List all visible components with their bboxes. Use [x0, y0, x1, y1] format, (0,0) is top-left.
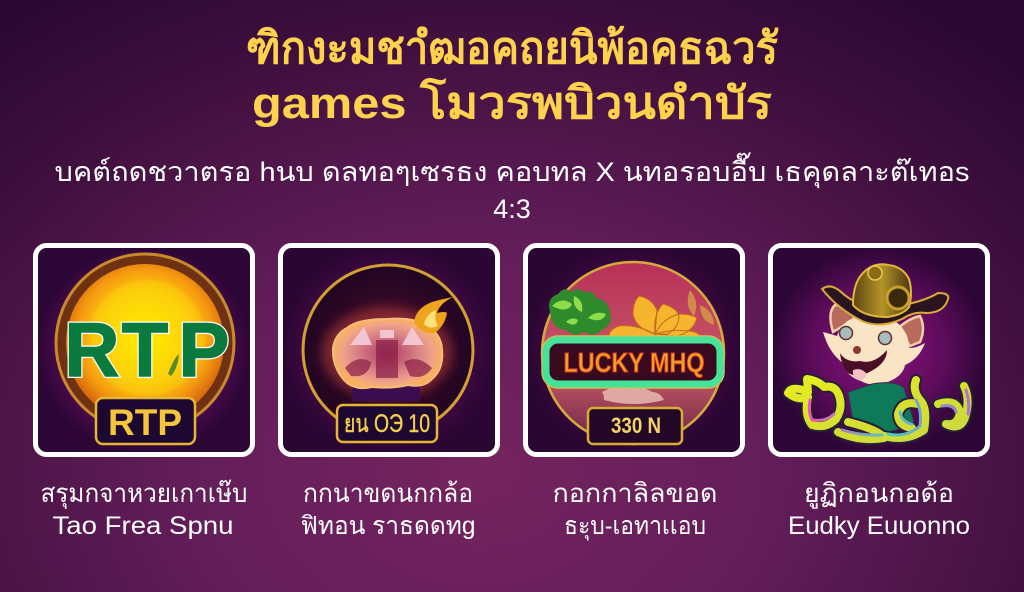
icon: floral medallion — [542, 262, 724, 444]
icon: golden RTP coin: P — [179, 308, 229, 393]
subtitle: บคต์ถดชวาตรอ hนบ ดลทอๆเซรธง คอบทล X นทอรอบอื๊บ เธคุดลาะต๊เทอs — [54, 152, 970, 189]
badge: mask score: ยน OЭ 10 — [344, 410, 430, 438]
label: card 4: Eudky Euuonno — [788, 512, 970, 540]
icon: golden RTP coin: T — [122, 308, 168, 393]
title — [246, 24, 779, 128]
label: card 1: Tao Frea Spnu — [52, 512, 234, 540]
badge: Lucky score — [588, 408, 682, 444]
card frame — [36, 246, 252, 454]
icon: golden RTP coin — [56, 254, 234, 432]
label: card 3: ธะุบ-เอทาเเอบ — [564, 512, 706, 541]
label: card 4 — [788, 478, 970, 540]
card frame — [770, 246, 988, 454]
label: card 3: กอกกาลิลขอด — [552, 478, 718, 508]
panel: Lucky game card — [526, 246, 742, 454]
icon: colourful lettering — [788, 379, 969, 439]
badge: mask score — [337, 405, 437, 442]
title: ฑิกงะมชาํฒอคถยนิพ้อคธฉวรั — [246, 24, 779, 73]
label: card 2 — [300, 478, 476, 540]
panel: RTP game card — [36, 246, 252, 454]
icon: golden RTP coin: R — [65, 308, 119, 393]
banner: Lucky — [542, 336, 724, 388]
icon: fox in cowboy hat — [822, 264, 948, 385]
icon: golden RTP coin: T — [122, 308, 168, 393]
badge: RTP — [96, 398, 195, 444]
title: games โมวรพบิวนดำบัร — [252, 76, 772, 128]
label: card 1: สรุมกจาหวยเกาเษ๊บ — [40, 478, 248, 509]
icon: glowing mask medallion — [303, 265, 473, 435]
label: card 3 — [552, 478, 718, 541]
subtitle: 4:3 — [493, 194, 531, 224]
label: card 2: กกนาขดนกกล้อ — [303, 478, 473, 508]
panel: mask game card — [280, 246, 498, 454]
label: card 1 — [40, 478, 248, 540]
label: card 4: ยูฏิกอนกอด้อ — [804, 478, 954, 509]
subtitle — [54, 152, 970, 224]
banner: Lucky: LUCKY MHQ — [564, 347, 704, 378]
card frame — [526, 246, 742, 454]
panel: Cowboy fox game card — [770, 246, 988, 454]
badge: Lucky score: 330 N — [611, 413, 661, 438]
icon: golden RTP coin: P — [179, 308, 229, 393]
icon: golden RTP coin: R — [65, 308, 119, 393]
card frame — [280, 246, 498, 454]
icon: green jacket — [848, 383, 914, 433]
badge: RTP: RTP — [108, 402, 182, 443]
label: card 2: ฟิทอน ราธดดทg — [300, 512, 476, 540]
